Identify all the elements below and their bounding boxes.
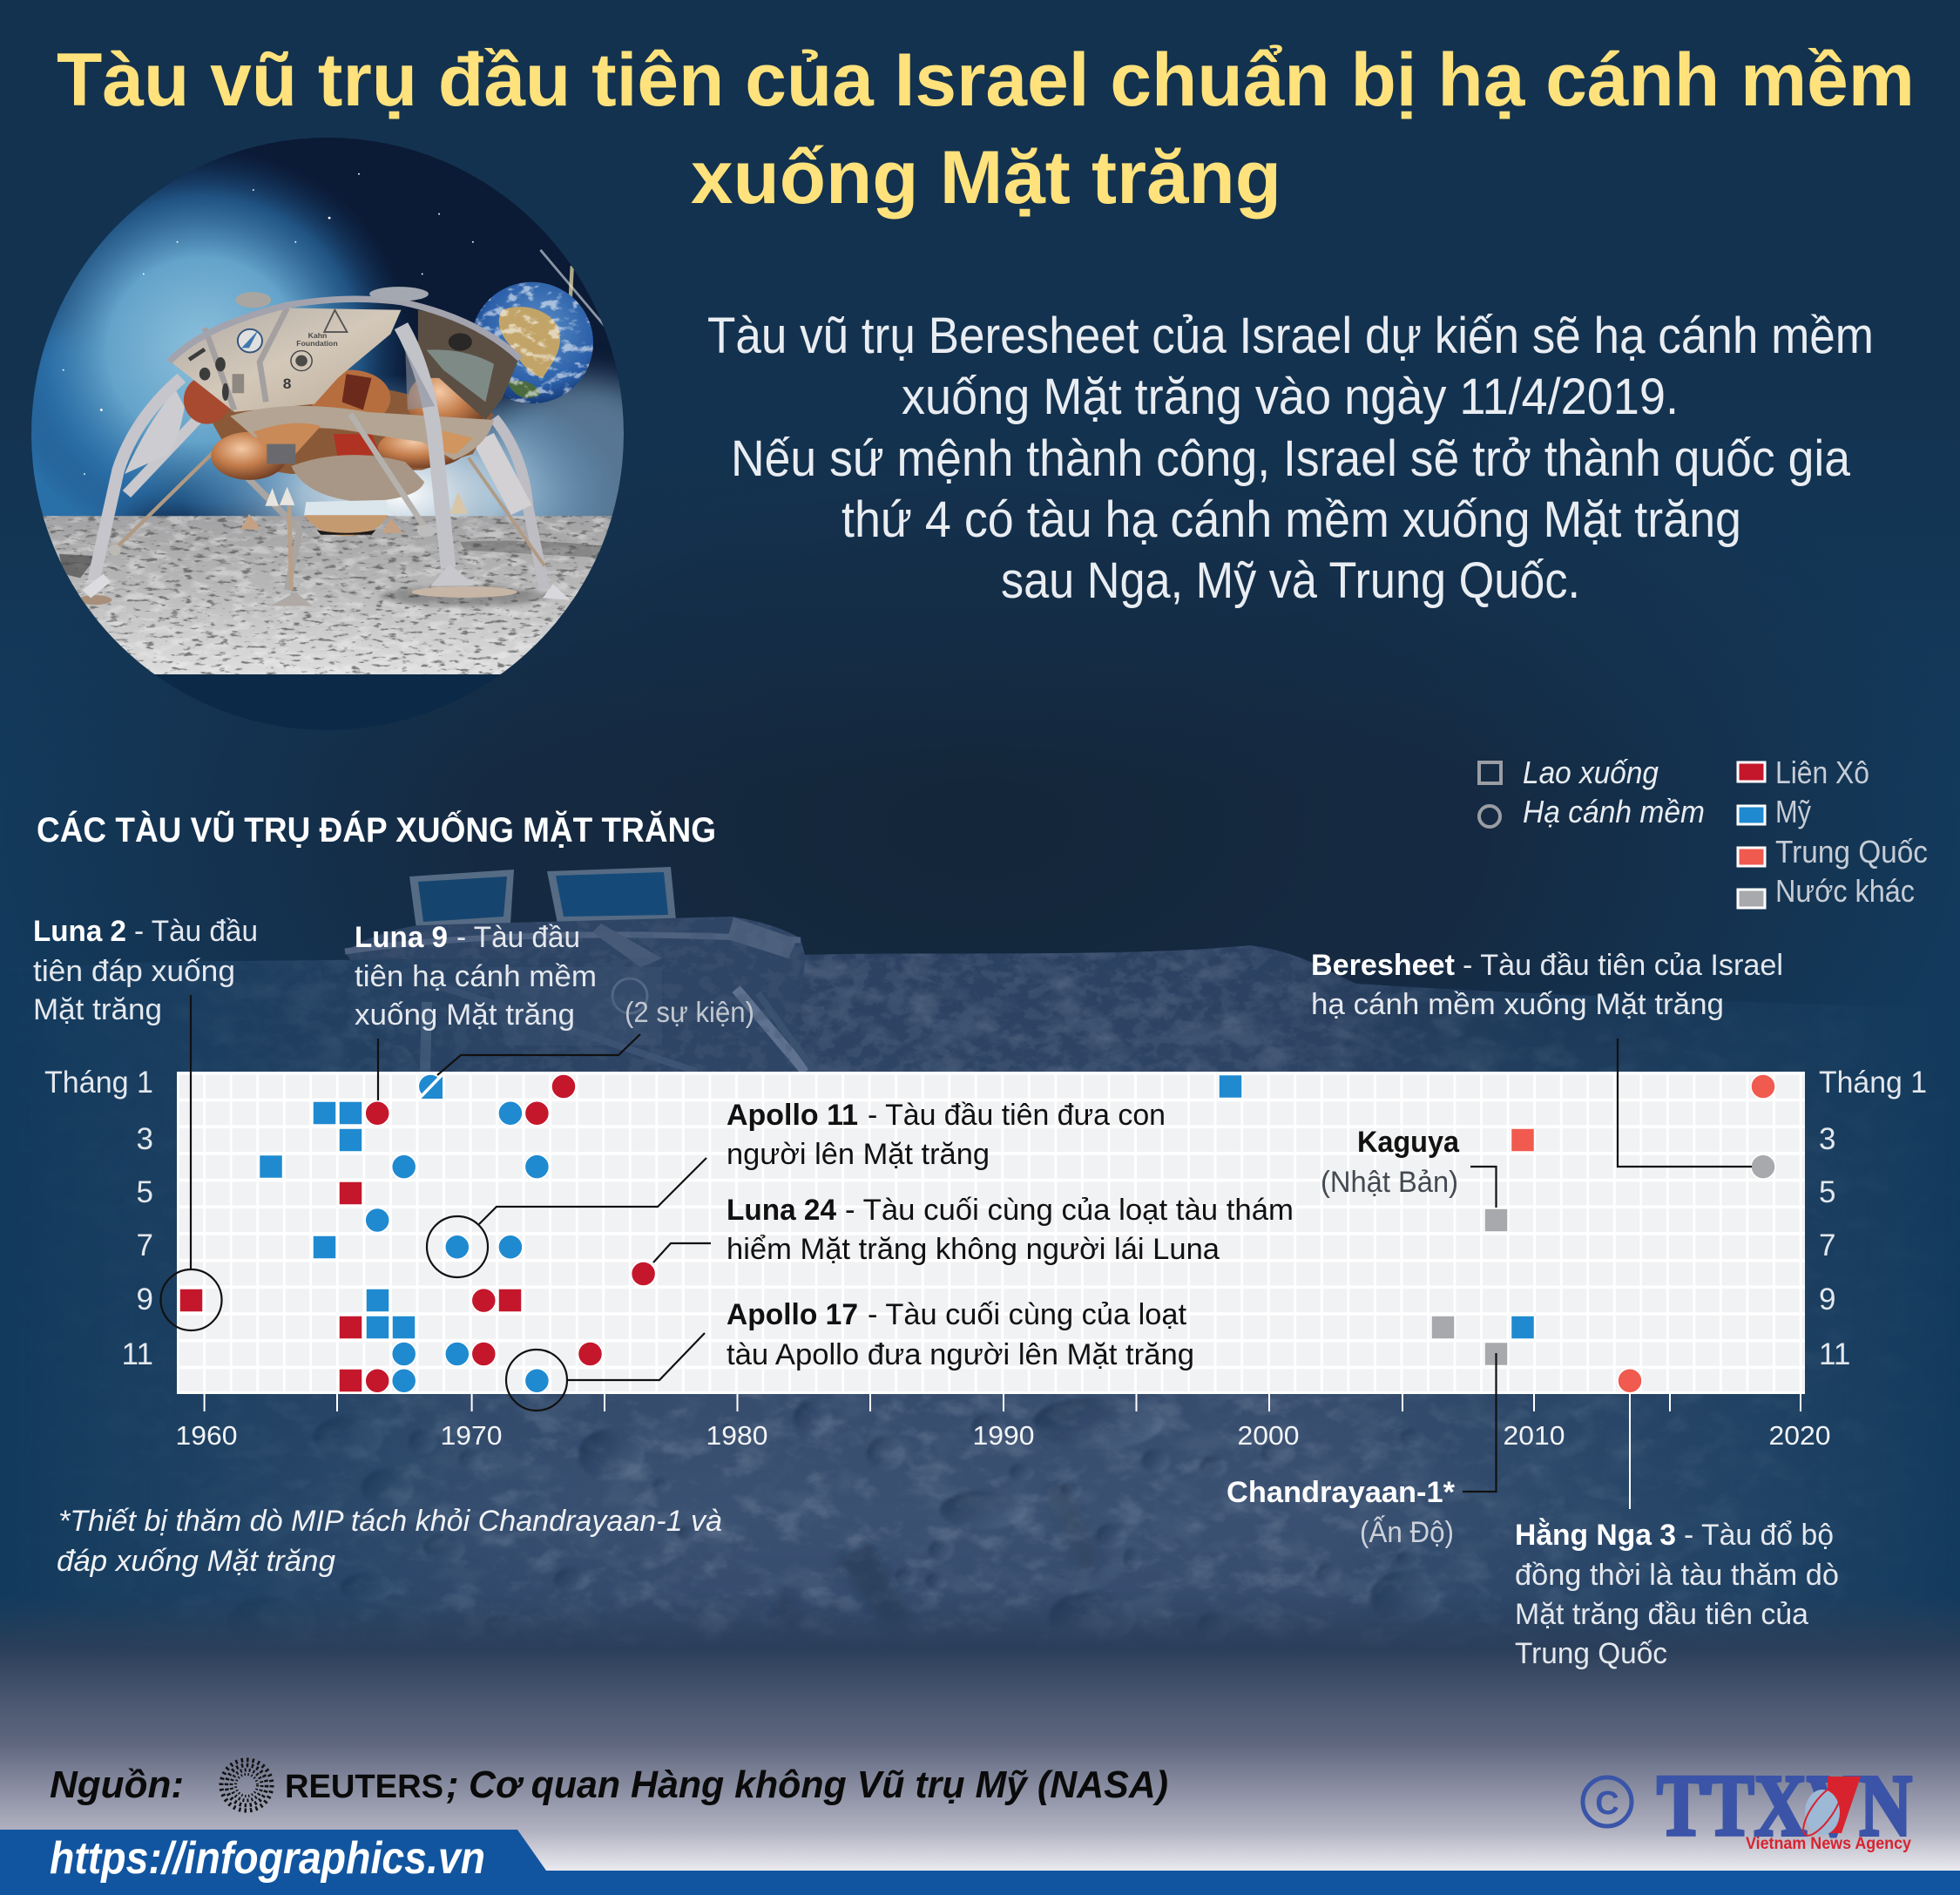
markers: Soviet Union bbox=[179, 1074, 656, 1393]
markers: China bbox=[1511, 1074, 1775, 1393]
source line: Nguồn: bbox=[50, 1763, 184, 1806]
month labels right: 3 bbox=[1819, 1122, 1835, 1156]
copper tanks bbox=[184, 376, 230, 424]
photo: lander on the Moon bbox=[31, 138, 624, 674]
month labels left: 5 bbox=[137, 1175, 153, 1209]
annotation: Beresheet: Beresheet bbox=[1311, 949, 1455, 982]
annotation: Hằng Nga 3: đồng thời là tàu thăm dò bbox=[1515, 1559, 1839, 1592]
legend: countries: Liên Xô bbox=[1775, 755, 1869, 790]
logo: TTXVN bbox=[1583, 1756, 1912, 1854]
annotation: Beresheet: - Tàu đầu tiên của Israel bbox=[1463, 949, 1783, 982]
front struts and leg bbox=[350, 414, 427, 530]
ground bbox=[43, 516, 612, 674]
title bbox=[57, 38, 1915, 220]
legend bbox=[1479, 755, 1928, 909]
month labels right: 11 bbox=[1819, 1337, 1850, 1371]
photo: lander on the Moon: Foundation bbox=[296, 339, 338, 348]
intro text: Nếu sứ mệnh thành công, Israel sẽ trở thành quốc gia bbox=[731, 430, 1851, 487]
legend: countries: Trung Quốc bbox=[1775, 834, 1928, 870]
dark crater streaks bbox=[771, 1481, 1102, 1636]
legend: countries: Mỹ bbox=[1775, 794, 1811, 829]
intro text: xuống Mặt trăng vào ngày 11/4/2019. bbox=[902, 369, 1679, 425]
moon terrain background bbox=[7, 867, 1895, 1641]
month labels left: 11 bbox=[122, 1337, 153, 1371]
annotation: Apollo 17: tàu Apollo đưa người lên Mặt trăng bbox=[727, 1338, 1194, 1371]
month labels right: 9 bbox=[1819, 1283, 1835, 1316]
annotation: Apollo 11: - Tàu đầu tiên đưa con bbox=[868, 1099, 1166, 1132]
markers: United States bbox=[260, 1074, 1535, 1393]
annotation: Luna 2 bbox=[33, 915, 258, 1026]
month labels left bbox=[44, 1066, 153, 1371]
annotation: Kaguya: (Nhật Bản) bbox=[1321, 1166, 1458, 1199]
intro text: Tàu vũ trụ Beresheet của Israel dự kiến sẽ hạ cánh mềm bbox=[707, 308, 1874, 364]
legend: outcome: Hạ cánh mềm bbox=[1523, 794, 1705, 829]
legend: countries: Nước khác bbox=[1775, 873, 1915, 909]
icon: Reuters dot logo bbox=[221, 1760, 272, 1810]
annotation: Luna 2: Mặt trăng bbox=[33, 993, 162, 1026]
website url: https://infographics.vn bbox=[50, 1833, 485, 1884]
stars bbox=[63, 146, 474, 475]
annotation: Luna 24: hiểm Mặt trăng không người lái Luna bbox=[727, 1233, 1220, 1266]
footer bar bbox=[0, 1830, 1960, 1895]
year axis: 2010 bbox=[1504, 1420, 1565, 1451]
annotation: Hằng Nga 3: Trung Quốc bbox=[1515, 1637, 1667, 1670]
annotation: Beresheet: hạ cánh mềm xuống Mặt trăng bbox=[1311, 988, 1724, 1021]
annotation: Chandrayaan-1 bbox=[1227, 1476, 1456, 1549]
footer gradient bbox=[0, 1594, 1960, 1871]
icon: copyright: C bbox=[1595, 1785, 1619, 1822]
annotation: Apollo 17 bbox=[727, 1298, 1194, 1371]
annotation: Luna 24: Luna 24 bbox=[727, 1194, 836, 1227]
logo: TTXVN: TTXVN bbox=[1657, 1756, 1912, 1854]
hull interior right bbox=[418, 310, 519, 420]
year axis: 2000 bbox=[1237, 1420, 1300, 1451]
intro text bbox=[707, 308, 1874, 609]
month labels right: 7 bbox=[1819, 1228, 1835, 1262]
wing and front-left leg bbox=[125, 389, 185, 474]
photo: lander on the Moon: 8 bbox=[283, 376, 291, 392]
year axis bbox=[176, 1394, 1831, 1451]
month labels left: 9 bbox=[137, 1283, 153, 1316]
footnote bbox=[57, 1505, 722, 1578]
footnote: đáp xuống Mặt trăng bbox=[57, 1545, 335, 1578]
sky bbox=[131, 138, 624, 516]
annotation: Luna 2: Luna 2 bbox=[33, 915, 126, 948]
footnote: *Thiết bị thăm dò MIP tách khỏi Chandrayaan-1 và bbox=[58, 1505, 722, 1538]
annotation: Luna 24 bbox=[727, 1194, 1294, 1266]
markers: other countries bbox=[1431, 1154, 1775, 1366]
year axis: 2020 bbox=[1768, 1420, 1831, 1451]
month labels right: Tháng 1 bbox=[1819, 1066, 1927, 1100]
logo: TTXVN: Vietnam News Agency bbox=[1746, 1835, 1911, 1853]
lower hull and engines bbox=[291, 455, 424, 502]
annotation: Hằng Nga 3: Mặt trăng đầu tiên của bbox=[1515, 1598, 1808, 1631]
annotation: Apollo 11: người lên Mặt trăng bbox=[727, 1138, 990, 1171]
chart heading: CÁC TÀU VŨ TRỤ ĐÁP XUỐNG MẶT TRĂNG bbox=[37, 809, 716, 849]
rim bbox=[169, 299, 520, 362]
legend: countries bbox=[1738, 755, 1928, 909]
annotation: Luna 9: Luna 9 bbox=[355, 921, 448, 954]
month labels left: Tháng 1 bbox=[44, 1066, 153, 1100]
annotation: Luna 9: tiên hạ cánh mềm bbox=[355, 960, 597, 993]
intro text: sau Nga, Mỹ và Trung Quốc. bbox=[1001, 552, 1580, 609]
marker: two events in January 1968 bbox=[418, 1074, 443, 1099]
intro text: thứ 4 có tàu hạ cánh mềm xuống Mặt trăng bbox=[841, 491, 1741, 548]
annotation: Hằng Nga 3: Hằng Nga 3 bbox=[1515, 1519, 1676, 1552]
hull panel bbox=[171, 308, 401, 412]
annotation: Luna 24: - Tàu cuối cùng của loạt tàu thám bbox=[845, 1194, 1294, 1227]
year axis: 1960 bbox=[176, 1420, 237, 1451]
year axis: 1990 bbox=[972, 1420, 1035, 1451]
rear legs bbox=[494, 418, 544, 590]
month labels left: 3 bbox=[137, 1122, 153, 1156]
photo: lander on the Moon: Kahn bbox=[308, 331, 327, 340]
annotation: Luna 9: - Tàu đầu bbox=[456, 921, 580, 954]
earth bbox=[469, 250, 608, 406]
source line bbox=[50, 1760, 1168, 1810]
annotation: Luna 9: xuống Mặt trăng bbox=[355, 998, 575, 1032]
annotation: Kaguya bbox=[1321, 1126, 1460, 1199]
month labels right: 5 bbox=[1819, 1175, 1835, 1209]
copper body backdrop bbox=[213, 389, 494, 474]
annotation: Apollo 17: Apollo 17 bbox=[727, 1298, 858, 1331]
annotation: Chandrayaan-1: (Ấn Độ) bbox=[1360, 1516, 1454, 1549]
annotation: Beresheet bbox=[1311, 949, 1783, 1021]
month labels left: 7 bbox=[137, 1228, 153, 1262]
leader line: Hằng Nga 3 bbox=[1629, 1394, 1631, 1509]
annotation: two events: (2 sự kiện) bbox=[625, 996, 754, 1028]
craters bbox=[226, 1397, 1497, 1657]
ring under hull bbox=[230, 406, 494, 460]
year axis: 1970 bbox=[441, 1420, 502, 1451]
source line: ; bbox=[446, 1763, 459, 1806]
annotation: Hằng Nga 3: - Tàu đổ bộ bbox=[1684, 1519, 1834, 1552]
chart grid bbox=[177, 1072, 1805, 1394]
annotation: Kaguya: Kaguya bbox=[1357, 1126, 1460, 1159]
annotation: Apollo 11 bbox=[727, 1099, 1166, 1171]
annotation: Luna 2: tiên đáp xuống bbox=[33, 955, 235, 988]
title: xuống Mặt trăng bbox=[691, 136, 1281, 220]
lander silhouette in background bbox=[344, 867, 814, 1072]
source line: Cơ quan Hàng không Vũ trụ Mỹ (NASA) bbox=[469, 1763, 1168, 1806]
highlight circles and leader lines bbox=[160, 995, 1752, 1492]
annotation: Luna 9 bbox=[355, 921, 597, 1032]
year axis: 1980 bbox=[706, 1420, 768, 1451]
annotation: Apollo 11: Apollo 11 bbox=[727, 1099, 858, 1132]
icon: copyright bbox=[1583, 1777, 1632, 1826]
title: Tàu vũ trụ đầu tiên của Israel chuẩn bị hạ cánh mềm bbox=[57, 38, 1915, 122]
annotation: Luna 2: - Tàu đầu bbox=[134, 915, 258, 948]
annotation: Hằng Nga 3 bbox=[1515, 1519, 1839, 1670]
annotation: Apollo 17: - Tàu cuối cùng của loạt bbox=[868, 1298, 1187, 1331]
source line: REUTERS bbox=[285, 1769, 443, 1805]
month labels right bbox=[1819, 1066, 1927, 1371]
annotation: Chandrayaan-1: Chandrayaan-1* bbox=[1227, 1476, 1456, 1509]
legend: outcome: Lao xuống bbox=[1523, 755, 1659, 790]
legend: outcome bbox=[1479, 755, 1705, 829]
dark disc behind photo bbox=[31, 138, 624, 730]
